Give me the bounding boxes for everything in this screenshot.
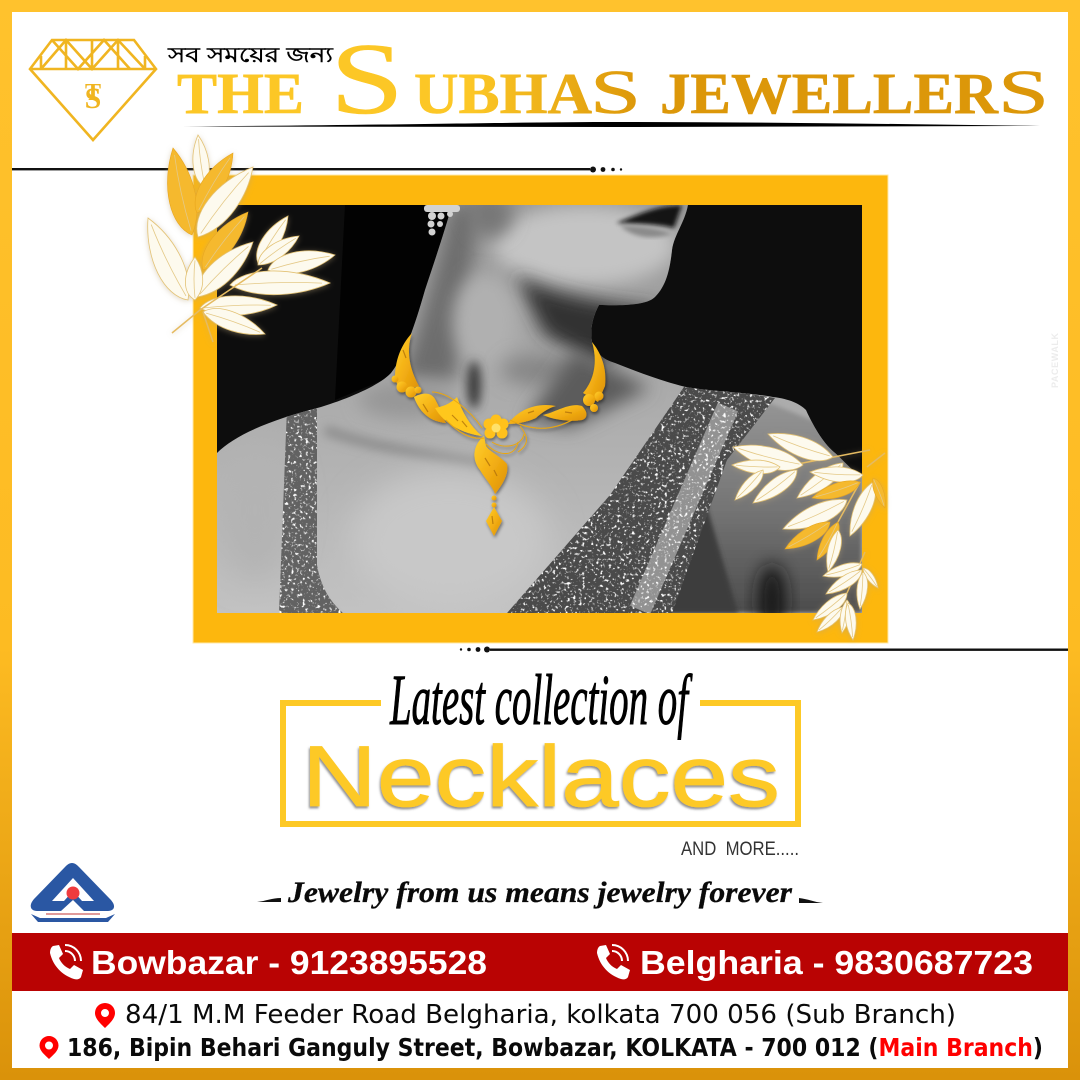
necklace: left cluster bbox=[392, 376, 422, 398]
icon: location pin main branch bbox=[40, 1036, 58, 1059]
photo: neck side shade bbox=[400, 205, 480, 380]
heading: necklaces: Necklaces bbox=[302, 729, 780, 825]
necklace: left leaves bbox=[414, 394, 446, 423]
brand name wordmark: S bbox=[998, 59, 1049, 127]
brand name wordmark: UBHA bbox=[414, 61, 592, 126]
photo: right arm bbox=[672, 391, 862, 613]
contact bar bbox=[12, 933, 1068, 991]
phone number Bowbazar: Bowbazar - 9123895528 bbox=[91, 944, 487, 981]
faint watermark: PACEWALK bbox=[1050, 332, 1060, 388]
necklace: right cluster bbox=[583, 392, 604, 412]
brand name wordmark: S bbox=[590, 59, 641, 127]
logo: diamond emblem bbox=[30, 40, 156, 140]
gold photo frame bbox=[193, 175, 888, 643]
necklaces title frame bbox=[283, 703, 798, 824]
necklace: flower bbox=[484, 414, 508, 438]
necklace: drop bbox=[486, 507, 502, 536]
address: main branch: 186, Bipin Behari Ganguly Street, Bowbazar, KOLKATA - 700 012 (Main Branch) bbox=[67, 1033, 1043, 1062]
gold necklace bbox=[392, 333, 605, 536]
leaf spray: bottom right bbox=[730, 426, 890, 641]
necklace: engraving marks bbox=[403, 350, 572, 524]
tapered rule under brand name bbox=[182, 122, 1040, 127]
necklace: filigree bbox=[432, 392, 572, 454]
photo: hair bbox=[335, 205, 448, 400]
photo: face bbox=[493, 205, 677, 285]
logo: TS monogram: S bbox=[85, 82, 101, 115]
heading: latest collection of: Latest collection of bbox=[389, 660, 693, 740]
brand tagline in Bengali: সব সময়ের জন্য bbox=[167, 44, 334, 67]
necklace: right horn bbox=[583, 342, 605, 402]
photo: left dress strap bbox=[279, 405, 343, 613]
brand name wordmark bbox=[177, 23, 1049, 136]
necklace: left horn bbox=[395, 333, 419, 392]
photo: skin and body bbox=[217, 193, 862, 636]
icon: phone Bowbazar bbox=[50, 945, 83, 979]
leaf spray: top left bbox=[134, 134, 337, 342]
phone number Belgharia: Belgharia - 9830687723 bbox=[640, 944, 1033, 981]
photo: right sequin panel bbox=[507, 384, 775, 613]
photo: neck highlight bbox=[453, 274, 517, 366]
tagline with dashes: Jewelry from us means jewelry forever bbox=[287, 876, 792, 909]
photo: lips bbox=[616, 205, 682, 228]
photo: collarbone bbox=[325, 430, 490, 465]
necklace: pendant leaf bbox=[474, 436, 507, 494]
bottom divider with dots bbox=[460, 646, 1068, 652]
photo: model wearing necklace bbox=[217, 193, 862, 636]
and more note: AND MORE..... bbox=[681, 839, 799, 860]
photo: jaw shadow bbox=[515, 275, 660, 365]
brand name wordmark: JEWELLER bbox=[660, 61, 999, 126]
icon: BIS hallmark bbox=[31, 863, 115, 922]
address: sub branch: 84/1 M.M Feeder Road Belgharia, kolkata 700 056 (Sub Branch) bbox=[125, 1000, 956, 1030]
logo: TS monogram: T bbox=[85, 80, 101, 106]
photo: earring bbox=[424, 205, 460, 236]
brand name wordmark: THE bbox=[177, 61, 304, 126]
brand name wordmark: S bbox=[330, 23, 404, 136]
necklace: right leaves bbox=[508, 405, 556, 424]
top divider with dots bbox=[12, 166, 622, 172]
icon: phone Belgharia bbox=[597, 945, 630, 979]
icon: location pin sub branch bbox=[95, 1003, 115, 1028]
